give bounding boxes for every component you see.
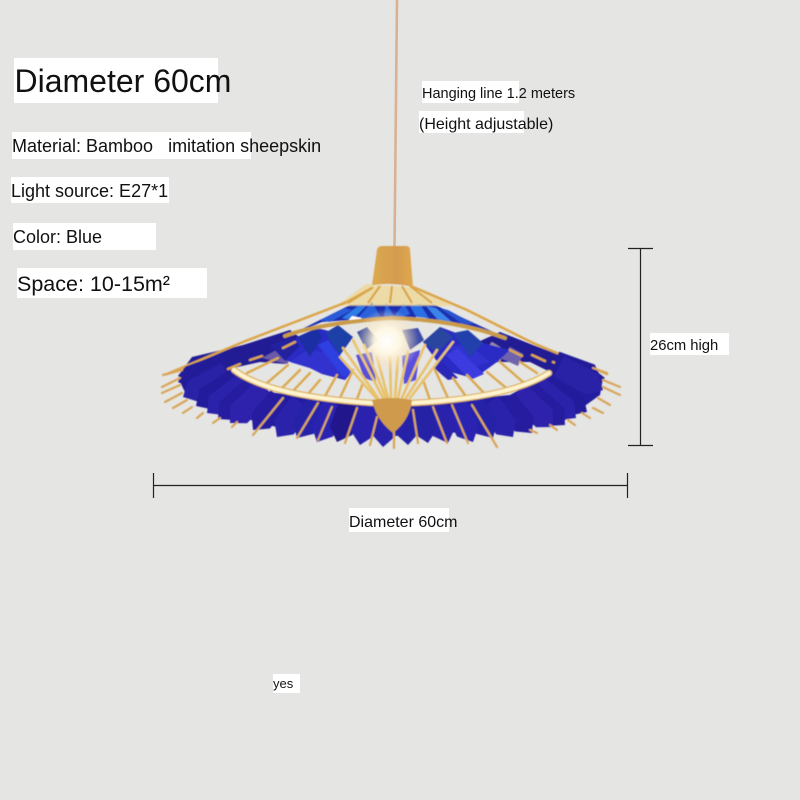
spec: material: Material: Bamboo imitation sheepskin: [12, 136, 321, 156]
label: height: 26cm high: [650, 338, 718, 354]
spec: light source: Light source: E27*1: [11, 181, 168, 201]
height dimension line: [628, 248, 653, 446]
diameter dimension line: [153, 473, 628, 498]
hanging cord: [394, 0, 397, 248]
lamp outer rib tips: [162, 368, 620, 448]
label: yes: [273, 674, 300, 693]
lamp bulb glow: [355, 309, 419, 373]
title: diameter: Diameter 60cm: [14, 63, 231, 99]
lamp back blue band: [178, 330, 605, 398]
label: diameter: Diameter 60cm: [349, 514, 457, 531]
pendant lamp: [162, 246, 620, 448]
lamp upper tier: [284, 284, 502, 338]
lamp front blue skirt: [174, 352, 609, 448]
label: height adjustable: (Height adjustable): [419, 116, 553, 133]
spec: space: [17, 268, 207, 298]
spec: color: Color: Blue: [13, 227, 102, 247]
lamp lower wooden finial: [372, 398, 412, 433]
spec: space: Space: 10-15m²: [17, 272, 170, 296]
lamp wooden top cap: [372, 246, 413, 287]
lamp front hoop ring: [234, 370, 549, 403]
lamp cone rim: [167, 287, 607, 377]
label: hanging line: Hanging line 1.2 meters: [422, 86, 575, 102]
lamp middle blue panels: [270, 325, 510, 384]
label: height: [650, 333, 729, 355]
spec: color: [13, 223, 156, 250]
lamp window ribs: [247, 358, 537, 400]
lamp central fan ribs: [340, 340, 453, 398]
label: yes: yes: [273, 676, 294, 691]
